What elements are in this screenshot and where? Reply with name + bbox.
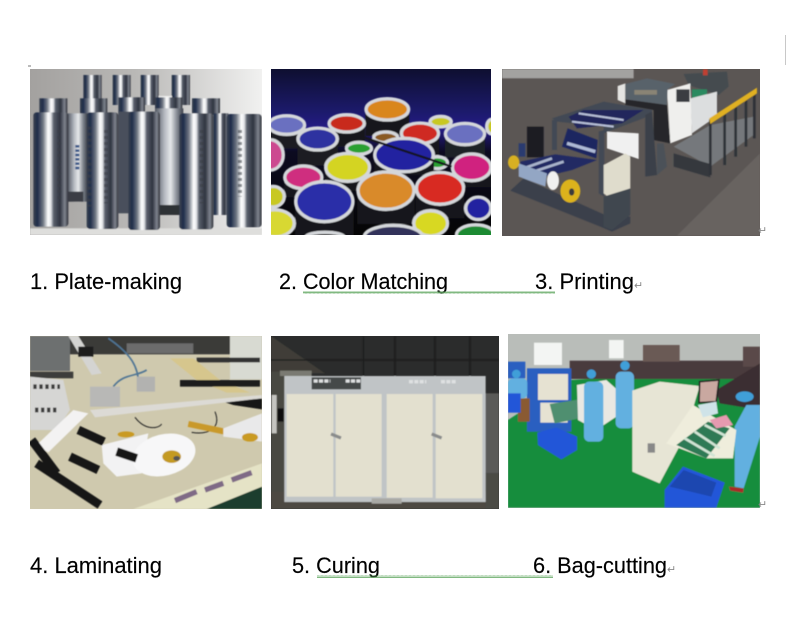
label: step 6: 6. Bag-cutting [533, 553, 667, 578]
mark: tiny anchor [28, 65, 31, 67]
spell-check underline: row 2 [317, 575, 553, 578]
mark: page corner [784, 35, 786, 65]
photo: curing oven [271, 336, 499, 509]
paragraph mark: row 1 labels: ↵ [634, 280, 643, 292]
paragraph mark: row 2 images: ↵ [758, 499, 767, 511]
label: step 5: 5. Curing [292, 553, 380, 578]
photo: open paint cans [271, 69, 491, 235]
label: step 3: 3. Printing [535, 269, 634, 294]
spell-check underline: row 1 [303, 291, 555, 294]
photo: plate-making steel cylinders [30, 69, 262, 235]
photo: printing machine [502, 69, 760, 236]
label: step 1: 1. Plate-making [30, 269, 182, 294]
label: step 2: 2. Color Matching [279, 269, 448, 294]
paragraph mark: row 1 images: ↵ [758, 225, 767, 237]
photo: laminating machine [30, 336, 262, 509]
label: step 4: 4. Laminating [30, 553, 162, 578]
paragraph mark: row 2 labels: ↵ [667, 564, 676, 576]
photo: bag-cutting workshop [508, 334, 760, 508]
